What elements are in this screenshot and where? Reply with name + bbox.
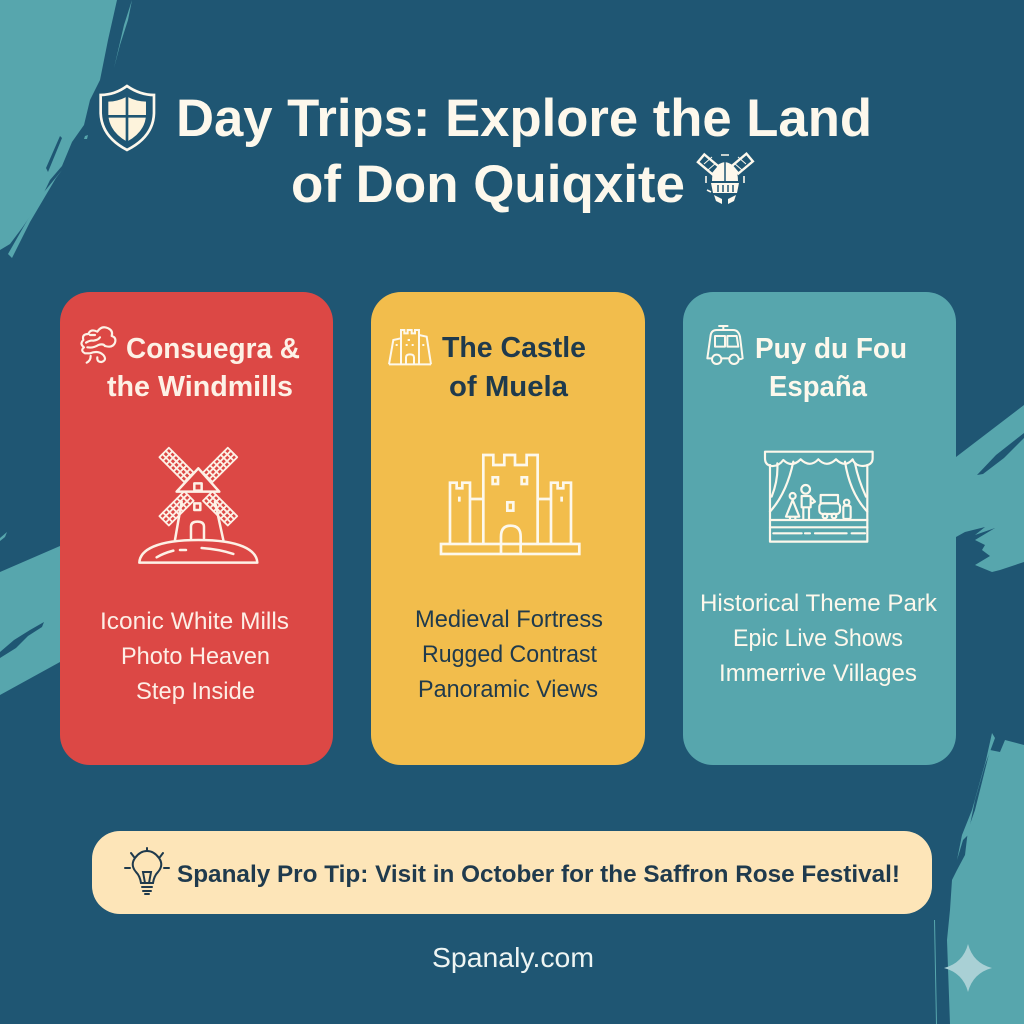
icon: windmill <box>139 448 257 563</box>
card heading <box>107 333 300 403</box>
callout text: Spanaly Pro Tip: Visit in October for the Saffron Rose Festival! <box>177 861 900 888</box>
card background <box>683 292 956 765</box>
icon: castle <box>441 455 579 554</box>
panel: Consuegra and the Windmills <box>60 292 333 765</box>
icon: light bulb <box>125 848 169 894</box>
card list: Immerrive Villages <box>719 660 917 687</box>
card list: Rugged Contrast <box>422 641 597 668</box>
card list <box>415 606 603 703</box>
card heading: of Muela <box>449 371 569 403</box>
card list: Step Inside <box>136 678 255 705</box>
brush stroke: top left <box>0 0 132 258</box>
brush stroke: left edge <box>0 532 60 695</box>
title <box>176 89 872 214</box>
icon: knight helmet with windmill sails <box>698 154 753 204</box>
panel: Puy du Fou Espana <box>683 292 956 765</box>
callout background <box>92 831 932 914</box>
icon: wind cloud <box>81 327 115 363</box>
title: of Don Quiqxite <box>291 155 685 214</box>
card heading <box>755 333 907 403</box>
title: Day Trips: Explore the Land <box>176 89 872 148</box>
card heading: Consuegra & <box>126 333 300 365</box>
icon: theatre stage <box>765 452 873 542</box>
card list <box>100 608 289 705</box>
card heading: The Castle <box>442 332 586 364</box>
card heading: España <box>769 371 868 403</box>
icon: shield <box>101 86 154 150</box>
card heading: Puy du Fou <box>755 333 907 365</box>
brush stroke: bottom right <box>934 733 1024 1024</box>
card list: Panoramic Views <box>418 676 598 703</box>
card background <box>60 292 333 765</box>
panel: The Castle of Muela <box>371 292 645 765</box>
card list: Medieval Fortress <box>415 606 603 633</box>
callout: pro tip <box>92 831 932 914</box>
card heading <box>442 332 586 403</box>
icon: van <box>707 326 743 364</box>
card list: Epic Live Shows <box>733 625 903 652</box>
footer website: Spanaly.com <box>432 942 594 973</box>
brush stroke: right edge <box>956 405 1024 572</box>
card list: Photo Heaven <box>121 643 270 670</box>
card background <box>371 292 645 765</box>
card list: Iconic White Mills <box>100 608 289 635</box>
icon: sparkle star <box>944 944 992 992</box>
card list: Historical Theme Park <box>700 590 938 617</box>
card heading: the Windmills <box>107 371 293 403</box>
icon: small castle <box>389 330 431 364</box>
card list <box>700 590 938 687</box>
